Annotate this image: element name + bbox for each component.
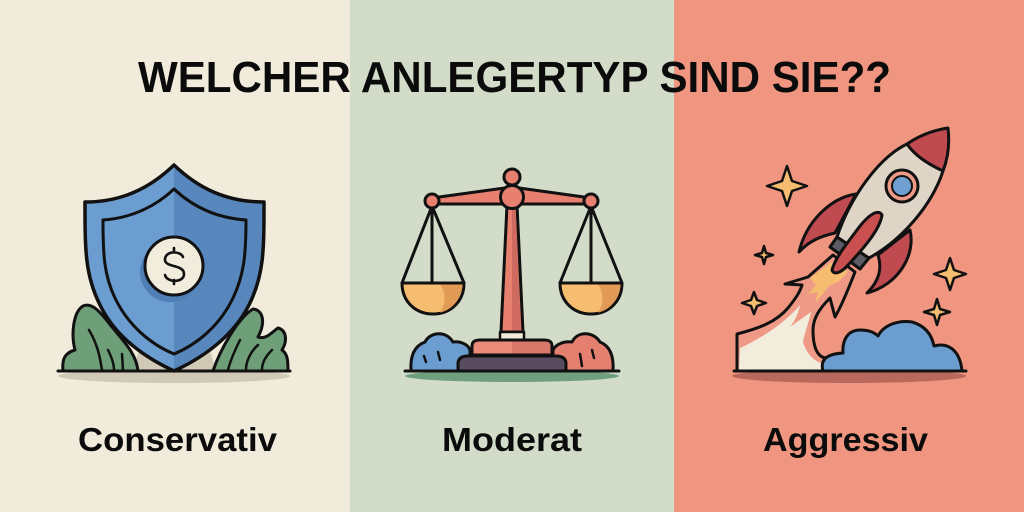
- left pan: [402, 283, 464, 314]
- top finial: [504, 169, 520, 185]
- star large: [767, 166, 807, 206]
- beam: [432, 187, 591, 204]
- panel: aggressive background: [674, 0, 1024, 512]
- shield body right: [174, 165, 264, 371]
- center fin: [832, 212, 882, 273]
- collar: [500, 332, 524, 340]
- coin: [145, 237, 203, 295]
- right fin: [867, 230, 911, 293]
- pillar shade: [512, 207, 521, 330]
- plant veins: [89, 330, 272, 370]
- icon: balance scale: [402, 169, 622, 382]
- left pan shade: [440, 284, 462, 312]
- red bush: [553, 334, 613, 371]
- star small: [755, 246, 773, 264]
- panel: moderate background: [350, 0, 674, 512]
- pillar: [501, 205, 523, 332]
- star lower right: [924, 299, 950, 325]
- base tier: [472, 340, 552, 355]
- rocket band: [830, 237, 869, 269]
- left fin: [799, 194, 856, 252]
- ground line: [58, 370, 290, 372]
- flame: [808, 262, 848, 303]
- window glass: [892, 176, 912, 196]
- shield outline: [85, 165, 264, 371]
- right pan: [560, 283, 622, 314]
- scale strings: [402, 206, 622, 283]
- blue bush: [411, 334, 470, 371]
- base shade: [512, 342, 550, 354]
- left beam end: [425, 194, 439, 208]
- right plant: [213, 309, 288, 371]
- rocket body: [837, 144, 943, 258]
- ground shadow: [58, 369, 290, 383]
- ground patch under shield: [130, 350, 216, 371]
- cloud: [822, 322, 962, 371]
- label: Moderat: Moderat: [442, 421, 582, 458]
- title: WELCHER ANLEGERTYP SIND SIE??: [138, 53, 891, 102]
- star left: [742, 292, 766, 314]
- hub: [500, 186, 524, 208]
- ground shadow: [732, 369, 966, 383]
- shield inner outline: [103, 189, 246, 354]
- dollar sign: [165, 248, 184, 284]
- label: Aggressiv: Aggressiv: [763, 421, 929, 458]
- right pan shade: [598, 284, 620, 312]
- star right: [934, 258, 966, 290]
- shield body left: [85, 165, 174, 371]
- window: [886, 170, 918, 202]
- left plant: [63, 305, 138, 371]
- ground ellipse: [405, 370, 619, 382]
- dark plinth: [458, 356, 566, 371]
- panel: conservative background: [0, 0, 350, 512]
- ground line: [734, 370, 966, 372]
- ground line: [405, 370, 619, 372]
- icon: shield with plants: [58, 165, 290, 383]
- icon: rocket launch: [732, 128, 966, 383]
- coin shadow: [140, 242, 200, 302]
- right beam end: [584, 194, 598, 208]
- bush details: [424, 350, 594, 366]
- nose cone: [907, 128, 949, 171]
- exhaust trail: [737, 255, 855, 371]
- label: Conservativ: Conservativ: [78, 421, 278, 458]
- trail cream: [739, 305, 821, 370]
